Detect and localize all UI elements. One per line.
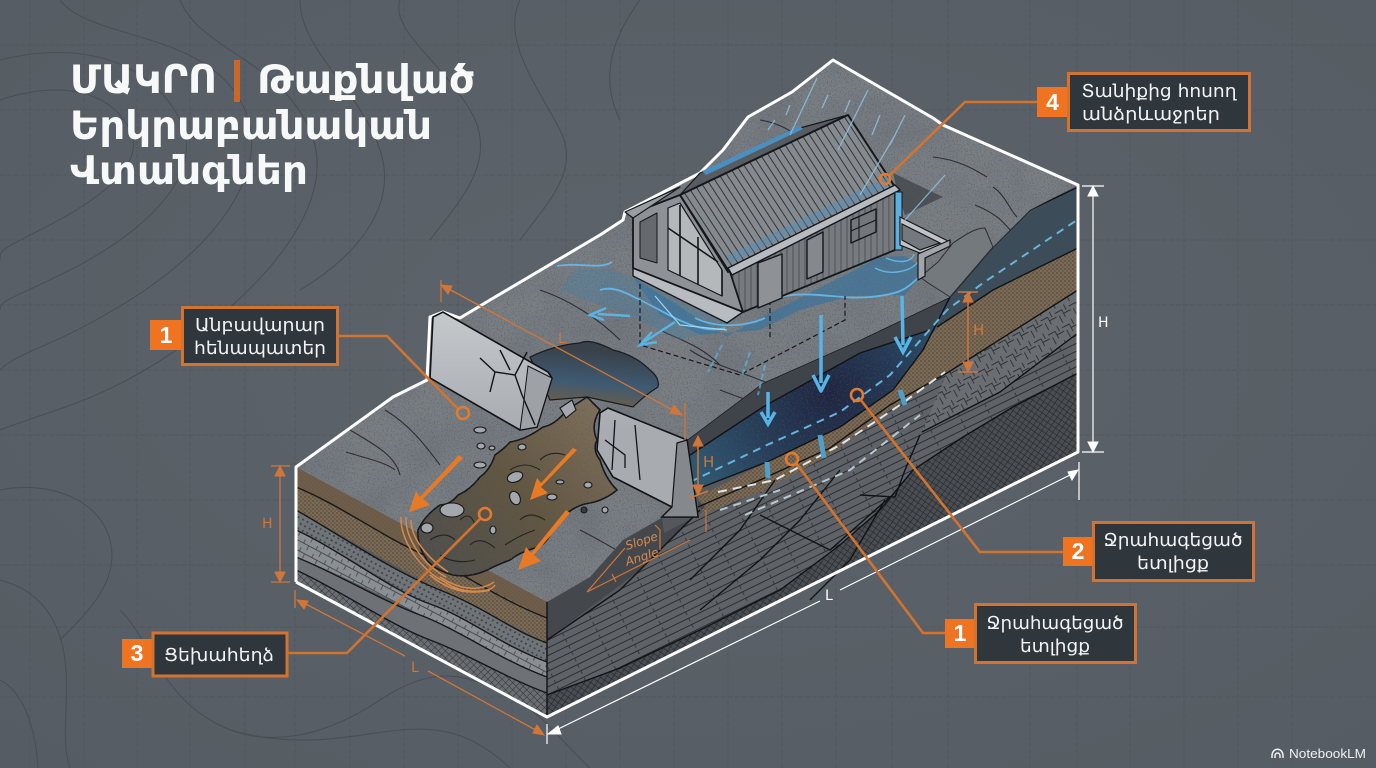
- callout 1: inadequate retaining walls: [150, 308, 469, 419]
- callout 4: roof runoff: [880, 74, 1250, 184]
- label box: [182, 308, 338, 364]
- downspout: [895, 192, 902, 250]
- rocky hillside: [920, 228, 993, 297]
- label box: Տանիքից հոսող: [1082, 81, 1237, 102]
- number badge: 1: [160, 322, 173, 348]
- title line 3: Վտանգներ: [70, 149, 308, 194]
- label box: Ջրահագեցած: [1104, 530, 1242, 551]
- dimension H right: H: [1098, 315, 1109, 331]
- blue gutter: [728, 185, 900, 275]
- title line 1 continued: Թաքնված: [257, 58, 475, 103]
- dimension L front left: L: [411, 660, 419, 676]
- dimension H right: [1082, 186, 1109, 452]
- leader line: [287, 518, 481, 653]
- landslide crater: [530, 342, 658, 407]
- top ground surface: [290, 55, 1085, 717]
- title separator: [234, 60, 240, 102]
- concrete deck: [633, 268, 743, 323]
- water left of house: [560, 268, 730, 340]
- anchor: [786, 453, 798, 465]
- slope angle label: Slope: [624, 529, 660, 553]
- gable wall with glazing: [633, 195, 743, 312]
- label box: [976, 604, 1136, 662]
- number badge: [1037, 87, 1068, 117]
- side wall with windows: [730, 190, 895, 312]
- number badge: 1: [954, 620, 967, 646]
- left soil face: [296, 467, 547, 717]
- anchor: [851, 389, 863, 401]
- callout 1 lower: saturated backfill: [786, 453, 1136, 662]
- number badge: 3: [131, 640, 143, 666]
- leader line: [796, 463, 945, 633]
- label box: [1094, 522, 1254, 580]
- upper dark layer: [893, 187, 1078, 390]
- label box: ետլիցք: [1137, 553, 1209, 574]
- crosshatched bedrock: [547, 373, 1078, 717]
- label box: Ջրահագեցած: [986, 613, 1124, 634]
- slide movement arrows: [409, 448, 577, 570]
- label box: հենապատեր: [194, 338, 326, 359]
- retaining wall rear: [430, 312, 552, 430]
- background contour lines: [0, 0, 640, 768]
- debris flow: [417, 396, 618, 577]
- callout 2: saturated backfill: [851, 389, 1254, 580]
- corrugated roof: [680, 115, 895, 270]
- rear eave: [702, 126, 803, 175]
- leader line: [889, 102, 1037, 176]
- toe ripples: [401, 517, 495, 592]
- title line 2: Երկրաբանական: [70, 104, 432, 149]
- slope angle label: Angle: [623, 545, 660, 569]
- white terrain outline: [296, 60, 1078, 717]
- leader line: [860, 399, 1063, 552]
- label box: Անբավարար: [195, 315, 325, 336]
- number badge: 4: [1046, 89, 1059, 115]
- slope angle annotation: [587, 510, 706, 592]
- rear roof slope: [680, 115, 848, 195]
- label box: ետլիցք: [1020, 636, 1090, 657]
- dimension H left: H: [262, 516, 273, 532]
- label box: անձրևաջրեր: [1082, 104, 1220, 125]
- number badge: [1063, 537, 1094, 566]
- rain streaks: [768, 78, 945, 220]
- dimension L front left: [295, 590, 544, 735]
- number badge: 2: [1072, 538, 1084, 564]
- anchor: [479, 508, 491, 520]
- dimension L rear: L: [558, 331, 566, 347]
- label box: [1068, 74, 1250, 130]
- title: [70, 58, 475, 194]
- number badge: [122, 639, 153, 668]
- dimension H lower inner: H: [703, 453, 714, 471]
- dimension H lower inner: [690, 436, 714, 498]
- striated rock layer: [547, 333, 1078, 695]
- watermark icon: [1272, 749, 1283, 758]
- slope angle label: [623, 529, 660, 569]
- label box: [153, 633, 287, 676]
- brown soil layer: [698, 248, 1078, 515]
- zone grain: [691, 311, 942, 486]
- isometric terrain block: [262, 55, 1109, 744]
- water front of house: [633, 256, 925, 337]
- dimension L front right: L: [825, 588, 833, 604]
- dimension H left: [262, 466, 290, 582]
- dimension L rear: [441, 280, 685, 440]
- house cast shadow: [893, 173, 943, 215]
- blue infiltration arrows: [590, 296, 911, 424]
- house: [625, 115, 902, 323]
- groundwater dashed lines: [690, 220, 1077, 515]
- dimension H upper inner: H: [973, 321, 984, 339]
- number badge: [150, 320, 182, 350]
- NotebookLM watermark: [1272, 747, 1366, 761]
- dimension H upper inner: [958, 292, 984, 372]
- retaining wall front: [597, 408, 698, 517]
- front dark band: [547, 500, 705, 640]
- L-shaped retaining wall: [900, 217, 950, 280]
- label box: Ցեխահեղձ: [164, 645, 274, 666]
- roof overhang edge: [625, 187, 680, 218]
- right geology face: [547, 187, 1078, 717]
- anchor: [880, 174, 890, 184]
- surface water around house: [557, 254, 925, 375]
- woven rock layer: [922, 290, 1078, 432]
- anchor: [457, 407, 469, 419]
- saturated water zone: [687, 297, 950, 493]
- leader line: [338, 336, 458, 409]
- watermark text: NotebookLM: [1289, 747, 1366, 761]
- dimension L front right: [547, 462, 1079, 744]
- wall footing: [662, 505, 704, 533]
- upper dark strip: [687, 297, 950, 457]
- number badge: [945, 619, 976, 648]
- title line 1: ՄԱԿՐՈ: [70, 58, 217, 103]
- callout 3: mudflow: [122, 508, 491, 676]
